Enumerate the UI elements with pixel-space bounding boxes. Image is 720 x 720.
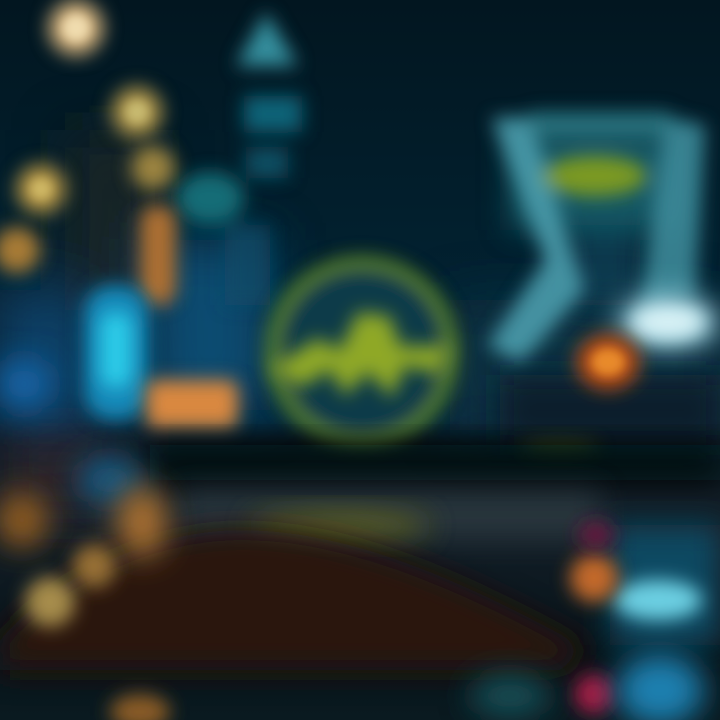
cyan vertical light xyxy=(0,285,148,420)
right building with cyan outline xyxy=(510,130,680,305)
city glow xyxy=(0,130,720,510)
tower on the upper left xyxy=(176,12,302,305)
bokeh lights on the left xyxy=(0,0,176,305)
brown foreground mound xyxy=(0,530,590,670)
central green circle emblem xyxy=(270,262,452,442)
white glow at right xyxy=(500,296,720,458)
water reflections xyxy=(78,456,600,540)
orange sign xyxy=(146,380,238,428)
lower right reflections xyxy=(470,521,720,720)
dark shoreline band xyxy=(150,445,720,480)
lower left bokeh lights xyxy=(0,486,170,720)
